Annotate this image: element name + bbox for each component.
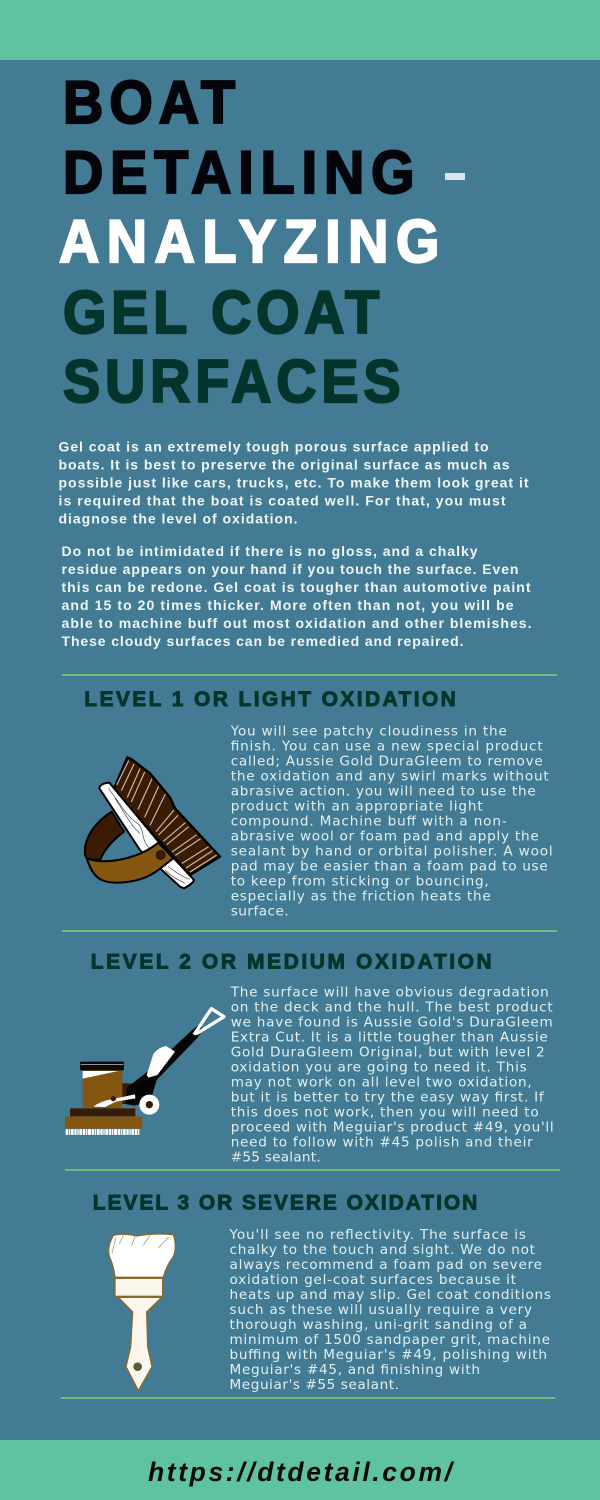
intro paragraph 2: These cloudy surfaces can be remedied and repaired. xyxy=(62,633,464,649)
icon: paint brush xyxy=(109,1234,175,1391)
body text: level 1: surface. xyxy=(231,904,289,920)
body text: level 1 xyxy=(230,724,553,920)
body text: level 2: oxidation you are going to need it. This xyxy=(231,1060,527,1076)
body text: level 3: buffing with Meguiar's #49, polishing with xyxy=(230,1347,547,1363)
body text: level 3: Meguiar's #55 sealant. xyxy=(230,1377,399,1393)
body text: level 3: oxidation gel-coat surfaces because it xyxy=(230,1272,516,1288)
body text: level 1: sealant by hand or orbital polisher. A wool xyxy=(231,844,553,860)
heading: level 1: LEVEL 1 OR LIGHT OXIDATION xyxy=(84,688,456,711)
body text: level 3: always recommend a foam pad on severe xyxy=(230,1257,542,1273)
intro paragraph 2: able to machine buff out most oxidation and other blemishes. xyxy=(62,615,532,631)
body text: level 1: compound. Machine buff with a non- xyxy=(231,814,507,830)
intro paragraph 1: possible just like cars, trucks, etc. To make them look great it xyxy=(58,475,529,491)
intro paragraph 2: Do not be intimidated if there is no gloss, and a chalky xyxy=(62,543,478,559)
body text: level 2: The surface will have obvious degradation xyxy=(230,985,549,1001)
body text: level 2: Extra Cut. It is a little tougher than Aussie xyxy=(231,1030,548,1046)
body text: level 1: finish. You can use a new special product xyxy=(231,739,543,755)
body text: level 1: product with an appropriate light xyxy=(231,799,483,815)
body text: level 3: Meguiar's #45, and finishing with xyxy=(230,1362,480,1378)
intro paragraph 1: boats. It is best to preserve the original surface as much as xyxy=(58,457,510,473)
intro paragraph 2: and 15 to 20 times thicker. More often than not, you will be xyxy=(62,597,514,613)
title: ANALYZING xyxy=(59,209,439,275)
body text: level 2: but it is better to try the easy way first. If xyxy=(231,1090,545,1106)
body text: level 3 xyxy=(228,1227,551,1393)
icon: scrub brush xyxy=(85,757,220,888)
icon: floor buffer machine xyxy=(65,1009,224,1132)
body text: level 3: such as these will usually require a very xyxy=(230,1302,532,1318)
title: GEL COAT xyxy=(63,280,379,346)
title: BOAT xyxy=(63,70,235,136)
title xyxy=(59,70,465,415)
body text: level 1: abrasive action. you will need to use the xyxy=(231,784,536,800)
body text: level 1: especially as the friction heats the xyxy=(231,889,491,905)
body text: level 2: we have found is Aussie Gold's DuraGleem xyxy=(231,1015,553,1031)
body text: level 2: may not work on all level two oxidation, xyxy=(231,1075,532,1091)
intro paragraph 1: diagnose the level of oxidation. xyxy=(58,511,298,527)
body text: level 3: thorough washing, uni-grit sanding of a xyxy=(230,1317,527,1333)
body text: level 3: minimum of 1500 sandpaper grit, machine xyxy=(230,1332,550,1348)
heading: level 2: LEVEL 2 OR MEDIUM OXIDATION xyxy=(91,950,492,973)
intro paragraph 2: this can be redone. Gel coat is tougher than automotive paint xyxy=(62,579,531,595)
body text: level 1: the oxidation and any swirl marks without xyxy=(231,769,549,785)
body text: level 1: pad may be easier than a foam pad to use xyxy=(231,859,548,875)
body text: level 1: called; Aussie Gold DuraGleem to remove xyxy=(231,754,543,770)
title: DETAILING xyxy=(63,140,415,206)
intro paragraph 1 xyxy=(58,439,529,527)
bottom band xyxy=(0,1440,600,1500)
body text: level 2: need to follow with #45 polish and their xyxy=(231,1135,533,1151)
body text: level 2: this does not work, then you will need to xyxy=(231,1105,539,1121)
intro paragraph 2: residue appears on your hand if you touch the surface. Even xyxy=(62,561,518,577)
body text: level 1: to keep from sticking or bouncing, xyxy=(231,874,489,890)
body text: level 3: You'll see no reflectivity. The surface is xyxy=(228,1227,526,1243)
body text: level 2 xyxy=(230,985,554,1166)
body text: level 2: #55 sealant. xyxy=(231,1150,321,1166)
heading: level 3: LEVEL 3 OR SEVERE OXIDATION xyxy=(93,1191,477,1214)
body text: level 3: chalky to the touch and sight. We do not xyxy=(230,1242,535,1258)
body text: level 2: proceed with Meguiar's product #49, you'll xyxy=(231,1120,554,1136)
body text: level 2: Gold DuraGleem Original, but with level 2 xyxy=(231,1045,545,1061)
intro paragraph 1: is required that the boat is coated well. For that, you must xyxy=(58,493,506,509)
body text: level 1: abrasive wool or foam pad and apply the xyxy=(231,829,539,845)
body text: level 3: heats up and may slip. Gel coat conditions xyxy=(230,1287,551,1303)
body text: level 2: on the deck and the hull. The best product xyxy=(231,1000,553,1016)
title: SURFACES xyxy=(63,349,401,415)
intro paragraph 1: Gel coat is an extremely tough porous surface applied to xyxy=(58,439,489,455)
website url: https://dtdetail.com/ xyxy=(148,1457,455,1487)
intro paragraph 2 xyxy=(62,543,532,649)
body text: level 1: You will see patchy cloudiness in the xyxy=(230,724,507,740)
top band xyxy=(0,0,600,60)
